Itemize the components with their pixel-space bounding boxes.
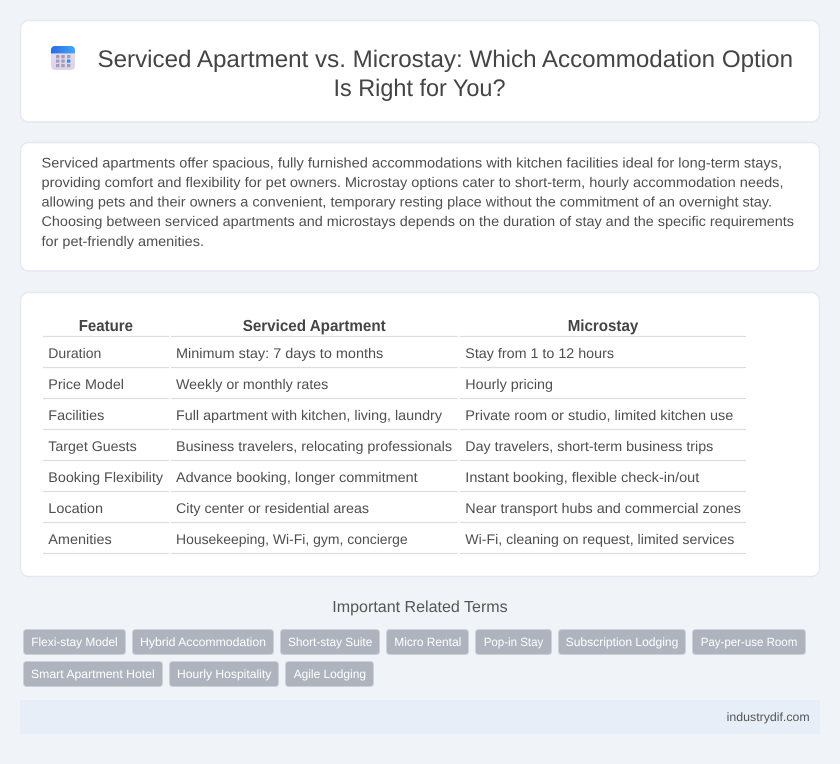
- table row: facilities: [43, 407, 746, 430]
- table row: duration: Minimum stay: 7 days to months: [176, 345, 383, 361]
- tag: hourly hospitality: [170, 662, 278, 686]
- text block: introduction paragraph: Serviced apartments offer spacious, fully furnished accommodations with kitchen facilities ideal for long-term stays,: [42, 154, 782, 170]
- tag: hybrid accommodation: [132, 630, 274, 654]
- tag: smart apartment hotel: [24, 662, 162, 686]
- table row: amenities: [43, 531, 746, 554]
- table row: booking flexibility: Advance booking, longer commitment: [176, 469, 418, 485]
- table row: price model: [43, 376, 746, 398]
- tag: agile lodging: Agile Lodging: [294, 667, 366, 681]
- table row: booking flexibility: Instant booking, flexible check-in/out: [465, 469, 699, 485]
- tag: short-stay suite: Short-stay Suite: [288, 635, 373, 649]
- table row: duration: Duration: [48, 345, 101, 361]
- table row: location: City center or residential areas: [176, 500, 369, 516]
- table row: price model: Weekly or monthly rates: [176, 376, 328, 392]
- table row: duration: [43, 345, 746, 368]
- panel: title card: [20, 20, 820, 122]
- table row: location: [43, 500, 746, 522]
- tag: pay-per-use room: [692, 630, 806, 654]
- icon: calendar: [51, 46, 75, 70]
- tag: pop-in stay: Pop-in Stay: [484, 635, 543, 649]
- panel: introduction: [20, 142, 820, 271]
- tag: pop-in stay: [476, 630, 552, 654]
- text block: introduction paragraph: [42, 154, 794, 249]
- heading: important related terms: Important Related Terms: [332, 599, 508, 616]
- table row: price model: Hourly pricing: [465, 376, 553, 392]
- tag: agile lodging: [286, 662, 374, 686]
- table header: Microstay: [568, 318, 638, 335]
- table row: booking flexibility: Booking Flexibility: [48, 469, 163, 485]
- title: [98, 46, 793, 102]
- table row: target guests: Target Guests: [48, 438, 137, 454]
- table row: location: Location: [48, 500, 103, 516]
- table row: amenities: Wi-Fi, cleaning on request, limited services: [465, 531, 734, 547]
- table row: location: Near transport hubs and commercial zones: [465, 500, 741, 516]
- tag: micro rental: [386, 630, 468, 654]
- tag: smart apartment hotel: Smart Apartment Hotel: [31, 667, 155, 681]
- text block: introduction paragraph: allowing pets and their owners a convenient, temporary resting place without the commitment of an overnight stay.: [42, 194, 772, 210]
- table header: [43, 318, 746, 336]
- text block: introduction paragraph: Choosing between serviced apartments and microstays depends on the duration of stay and the specific requirements: [42, 213, 794, 229]
- panel: comparison table: [20, 292, 820, 576]
- tag: short-stay suite: [280, 630, 380, 654]
- text block: introduction paragraph: providing comfort and flexibility for pet owners. Microstay options cater to short-term, hourly accommodation needs,: [42, 174, 784, 190]
- footer: [20, 700, 820, 734]
- tag: flexi-stay model: [24, 630, 126, 654]
- table row: booking flexibility: [43, 469, 746, 492]
- table row: target guests: [43, 438, 746, 460]
- tag: pay-per-use room: Pay-per-use Room: [701, 635, 797, 649]
- table row: duration: Stay from 1 to 12 hours: [465, 345, 614, 361]
- footer: industrydif.com: [727, 710, 810, 724]
- table row: facilities: Facilities: [48, 407, 104, 423]
- tag: micro rental: Micro Rental: [394, 635, 461, 649]
- table row: amenities: Amenities: [48, 531, 112, 547]
- tag group: related terms: [24, 630, 806, 686]
- tag: subscription lodging: Subscription Lodging: [566, 635, 678, 649]
- tag: subscription lodging: [558, 630, 686, 654]
- table row: facilities: Private room or studio, limited kitchen use: [465, 407, 734, 423]
- title: Serviced Apartment vs. Microstay: Which Accommodation Option: [98, 46, 793, 73]
- tag: hybrid accommodation: Hybrid Accommodation: [140, 635, 266, 649]
- table row: target guests: Day travelers, short-term business trips: [465, 438, 713, 454]
- table row: facilities: Full apartment with kitchen, living, laundry: [176, 407, 442, 423]
- table row: price model: Price Model: [48, 376, 124, 392]
- table row: amenities: Housekeeping, Wi-Fi, gym, concierge: [176, 531, 408, 547]
- table header: Feature: [79, 318, 133, 335]
- table header: Serviced Apartment: [243, 318, 386, 335]
- text block: introduction paragraph: for pet-friendly amenities.: [42, 233, 204, 249]
- tag: flexi-stay model: Flexi-stay Model: [31, 635, 118, 649]
- title: Is Right for You?: [334, 75, 506, 102]
- tag: hourly hospitality: Hourly Hospitality: [177, 667, 271, 681]
- table row: target guests: Business travelers, relocating professionals: [176, 438, 452, 454]
